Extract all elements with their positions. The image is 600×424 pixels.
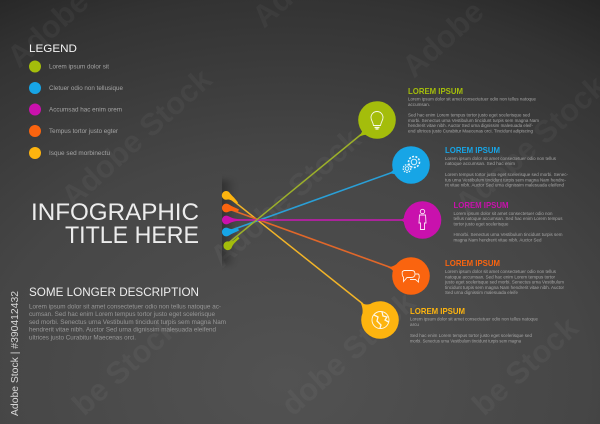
- watermarks: dobe Stock: [274, 284, 422, 422]
- title: INFOGRAPHIC: [31, 199, 199, 226]
- heading: LOREM IPSUM: [445, 258, 500, 268]
- body: justo eget scelerisque sed morbi. Senectus urna Vestibulum: [444, 280, 564, 286]
- description body: cumsan. Sed hac enim Lorem tempus tortor justo eget scelerisque: [29, 311, 215, 318]
- body: morbi. Senectus urna Vestibulum tincidunt turpis sem magna: [410, 338, 521, 344]
- text block: magenta: [454, 200, 563, 243]
- text block: blue: [445, 145, 568, 188]
- body: Sed hac enim Lorem tempus tortor justo eget scelerisque sed: [410, 333, 532, 339]
- watermarks: Adobe Stock: [203, 121, 368, 274]
- body: rit vitae nibh. Auctor Sed urna dignissim malesuada eleifend: [445, 182, 564, 188]
- description body: sed morbi. Senectus urna Vestibulum tincidunt turpis sem magna Nam: [29, 319, 226, 326]
- body: Lorem ipsum dolor sit amet consectetuer odio non tellus: [445, 156, 557, 162]
- body: [408, 96, 539, 134]
- watermarks: Adobe Stock: [54, 61, 219, 214]
- node: blue, gears: [389, 146, 430, 184]
- legend item: blue: Cletuer odio non tellusique: [49, 85, 123, 92]
- body: arcu: [410, 322, 419, 328]
- legend item: orange: Tempus tortor justo egter: [49, 128, 118, 135]
- connector: magenta: [222, 216, 403, 224]
- body: [410, 316, 538, 344]
- text block: orange: [444, 258, 564, 296]
- body: tincidunt turpis sem magna Nam hendrerit vitae nibh. Auctor: [445, 285, 564, 291]
- body: tus urna Vestibulum tincidunt turpis sem magna Nam hendre-: [445, 177, 566, 183]
- description heading: SOME LONGER DESCRIPTION: [29, 285, 199, 299]
- body: morbi. Senectus urna Vestibulum tincidunt turpis sem magna Nam: [408, 118, 539, 124]
- title: TITLE HERE: [65, 222, 199, 249]
- connector: blue: [222, 172, 392, 236]
- heading: LOREM IPSUM: [408, 86, 463, 96]
- icon: person: [419, 209, 426, 230]
- title: [31, 199, 199, 249]
- legend heading: LEGEND: [29, 43, 77, 55]
- body: accumsan.: [408, 103, 430, 108]
- heading: LOREM IPSUM: [454, 200, 509, 210]
- body: Lorem ipsum dolor sit amet consectetuer odio non tellus: [445, 269, 557, 275]
- heading: LOREM IPSUM: [410, 306, 465, 316]
- side id text: Adobe Stock | #390412432: [9, 291, 21, 416]
- body: natoque accumsan. Sed hac enim Lorem tempus tortor: [445, 274, 555, 280]
- icon: chat bubbles: [402, 270, 419, 282]
- body: Lorem ipsum dolor sit amet consectetuer odio non tellus natoque: [410, 316, 538, 322]
- body: Sed urna dignissim malesuada eleife: [445, 290, 518, 296]
- body: tellus natoque accumsan. Sed hac enim Lorem tempus: [454, 216, 563, 222]
- connector: orange: [222, 204, 392, 268]
- connector: yellow: [222, 191, 363, 304]
- description body: Lorem ipsum dolor sit amet consectetuer odio non tellus natoque ac-: [29, 304, 221, 310]
- legend item: green: Lorem ipsum dolor sit: [49, 64, 109, 70]
- legend item: yellow: Isque sed morbinectu: [49, 150, 110, 157]
- body: [445, 156, 568, 188]
- text block: yellow: [410, 306, 538, 344]
- icon: lightbulb: [371, 112, 383, 129]
- watermarks: be Stock: [65, 309, 185, 422]
- description body: hendrerit vitae nibh. Auctor Sed urna dignissim malesuada eleifend: [29, 327, 216, 334]
- description body: ultrices justo Curabitur Maecenas orci.: [29, 334, 136, 341]
- body: magna Nam hendrerit vitae nibh. Auctor Sed: [454, 237, 542, 243]
- node: green, lightbulb: [358, 101, 396, 139]
- body: Lorem ipsum dolor sit amet consectetuer odio non tellus natoque: [408, 96, 536, 102]
- hub shadow: [222, 180, 232, 266]
- node: yellow, globe: [360, 301, 399, 339]
- legend: [29, 43, 123, 159]
- body: Sed hac enim Lorem tempus tortor justo eget scelerisque sed: [408, 112, 530, 118]
- connector: green: [223, 134, 361, 250]
- watermarks: be Stock: [465, 309, 585, 422]
- text block: green: [408, 86, 539, 134]
- description body: [29, 304, 226, 341]
- icon: gears: [403, 156, 420, 172]
- body: Lorem ipsum dolor sit amet consectetuer odio non: [454, 211, 553, 217]
- body: [454, 211, 563, 243]
- icon: globe: [372, 312, 389, 328]
- body: Hmorbi. Senectus urna Vestibulum tincidunt turpis sem: [454, 232, 563, 238]
- body: Lorem tempus tortor justo eget scelerisque sed morbi. Senec-: [445, 172, 568, 178]
- node: magenta, person: [400, 201, 441, 239]
- body: natoque accumsan. Sed hac enim: [445, 161, 515, 167]
- body: [444, 269, 564, 296]
- description: [29, 285, 226, 341]
- legend item: magenta: Accumsad hac enim orem: [49, 106, 122, 114]
- body: end ultrices justo Curabitur Maecenas orci. Tincidunt adipiscing: [408, 128, 533, 134]
- body: hendrerit vitae nibh. Auctor Sed urna dignissim malesuada eleif-: [408, 123, 533, 129]
- node: orange, chat: [388, 257, 430, 295]
- heading: LOREM IPSUM: [445, 145, 500, 155]
- body: tortor justo eget scelerisque: [454, 222, 509, 228]
